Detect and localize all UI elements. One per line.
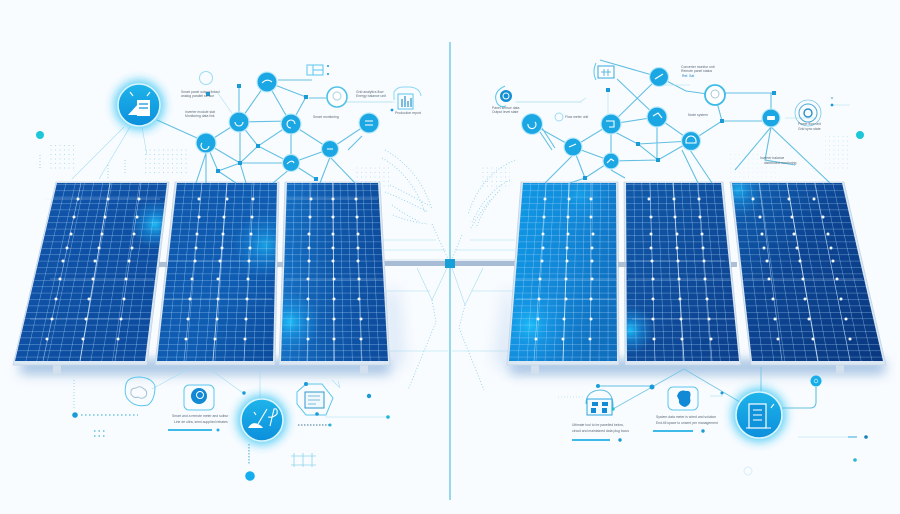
callout text one: Ultimate tool to be panelled below,	[572, 423, 624, 427]
dot matrix fields	[50, 135, 849, 187]
callout text two	[656, 415, 718, 425]
dot cluster	[94, 431, 106, 436]
progress bar	[168, 428, 220, 432]
network labels: Inverter balance	[760, 156, 784, 160]
network labels: Smart monitoring	[313, 115, 339, 119]
small junction dot	[242, 391, 246, 395]
right side markers	[798, 435, 868, 462]
ring marker: Flow meter unit	[565, 115, 588, 119]
network labels: Smart panel output linked	[181, 90, 220, 94]
panel clamps	[618, 262, 737, 267]
outline icon: bar chart	[391, 87, 421, 111]
panel shadow	[20, 360, 885, 374]
traces from panels	[613, 367, 761, 409]
solar panel 2	[154, 182, 280, 366]
solar panel array: right	[506, 182, 886, 374]
solar panel 3	[278, 182, 390, 374]
dotted drop line and end dot	[245, 444, 255, 481]
small junction	[710, 392, 724, 396]
small junctions	[583, 88, 776, 180]
network labels: Energy balance unit	[356, 94, 386, 98]
ring marker	[555, 113, 588, 121]
badge icon	[668, 387, 698, 410]
network labels: distributed monitoring	[764, 161, 797, 165]
lower callouts: right	[558, 367, 868, 475]
thin lines to panels	[72, 92, 395, 179]
faint ring	[744, 467, 752, 475]
solar panel 5	[624, 182, 742, 366]
progress bar two	[653, 429, 705, 433]
dotted marker line	[72, 380, 138, 418]
network labels: Grid sync state	[798, 127, 821, 131]
central hub icon	[114, 80, 164, 130]
callout text one	[572, 423, 629, 433]
progress bar one	[572, 438, 622, 442]
network labels	[181, 90, 421, 119]
glowing document icon	[732, 388, 786, 442]
connecting lines	[157, 80, 369, 183]
top-right marker	[831, 97, 850, 106]
outline icon: screen	[307, 65, 329, 75]
small junctions	[206, 84, 318, 181]
outline icon: target rings	[795, 100, 821, 126]
network labels: Grid analytics flow	[356, 90, 384, 94]
grid glyph	[291, 453, 316, 467]
network diagram: left	[36, 65, 421, 183]
traces from panels	[152, 367, 260, 399]
dotted arcs and circuit traces	[382, 150, 515, 390]
callout text	[172, 414, 229, 424]
lower callouts: left	[72, 367, 390, 481]
solar panel 6	[730, 182, 886, 374]
solar panel array: left	[13, 182, 390, 374]
glowing tool icon	[237, 395, 287, 445]
callout text two: End-fill space to unsent per management	[656, 421, 718, 425]
callout text one: circuit and maintained data plug focus	[572, 429, 629, 433]
connecting lines	[532, 60, 830, 183]
network labels: analog parallel sensor	[181, 94, 215, 98]
factory icon	[586, 384, 654, 415]
central connecting bar	[384, 259, 516, 268]
panel clamps	[159, 262, 283, 267]
network nodes	[196, 72, 379, 172]
network labels: Remote panel status	[681, 69, 712, 73]
gauge connector	[782, 376, 822, 408]
network labels: Production report	[395, 111, 421, 115]
outline icon: document hexagon	[297, 382, 333, 416]
central divider	[383, 42, 515, 500]
faint dotted trace	[558, 396, 583, 398]
outline icon: ring	[200, 72, 212, 84]
network diagram: right	[492, 60, 864, 183]
outline icon: cloud	[125, 377, 155, 406]
panel side glow	[384, 290, 514, 366]
solar panel 1	[13, 182, 179, 374]
callout text: Line de ultra, semi-supplied rebates	[174, 420, 228, 424]
callout text two: System data meter is wired and solution	[656, 415, 716, 419]
network labels: Inverter module stat	[185, 110, 215, 114]
network labels: Monitoring data link	[185, 114, 215, 118]
sparkle marker	[332, 380, 340, 388]
network labels: Ref. Sat	[682, 74, 694, 78]
small dashed markers	[40, 155, 125, 178]
outline icon: screen	[594, 63, 614, 80]
solar panel 4	[506, 182, 620, 374]
network labels: Node system	[688, 113, 708, 117]
outline icon: disc	[327, 87, 392, 107]
network labels: Panel sensor data	[492, 106, 519, 110]
dash row	[298, 424, 331, 426]
network labels: Power flow unit	[798, 122, 821, 126]
network labels	[492, 65, 821, 165]
thin lines to panels	[515, 85, 815, 120]
status dot	[36, 131, 44, 139]
network labels: Converter monitor unit	[681, 65, 715, 69]
right trace	[325, 394, 390, 419]
status dot	[856, 131, 864, 139]
network nodes	[522, 68, 780, 169]
network labels: Output level state	[492, 110, 519, 114]
outline icon: shield badge	[184, 385, 214, 410]
outline icon: head	[496, 86, 582, 107]
callout text: Smart and a remote meter and solbur	[172, 414, 229, 418]
